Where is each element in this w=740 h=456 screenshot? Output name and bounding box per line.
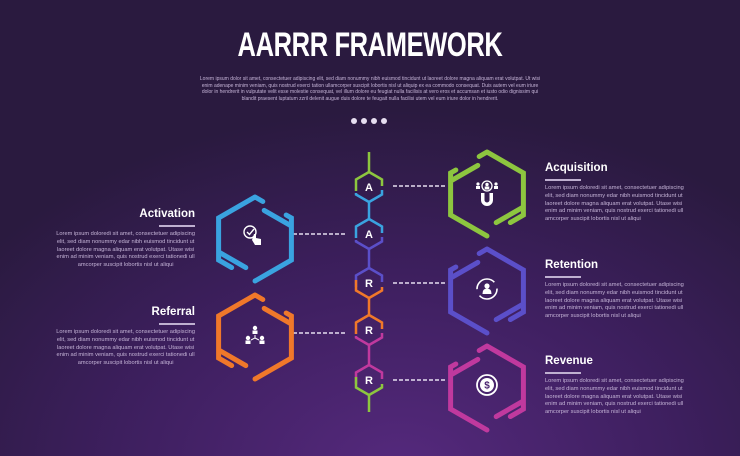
icon: touch check bbox=[244, 226, 261, 245]
text block: revenue: amcorper suscipit lobortis nisl ut aliqui bbox=[545, 409, 641, 415]
dashed connectors bbox=[293, 186, 446, 380]
text block: retention: Retention bbox=[545, 259, 598, 271]
text block: referral: amcorper suscipit lobortis nisl ut aliqui bbox=[78, 360, 174, 366]
text block: referral bbox=[56, 306, 195, 366]
big hex revenue bbox=[451, 346, 523, 430]
text block: activation: elit, sed diam nonummy edar nibh euismod tincidunt ut bbox=[57, 239, 194, 245]
small hex R1 bbox=[356, 268, 382, 298]
text block: activation: Activation bbox=[139, 208, 195, 220]
text block: retention: amcorper suscipit lobortis nisl ut aliqui bbox=[545, 313, 641, 319]
text block: retention: laoreet dolore magna aliquam erat volutpat. Utase wisi bbox=[545, 298, 682, 304]
text block: acquisition: Lorem ipsum doloredi sit amet, consectetuer adipiscing bbox=[545, 185, 684, 191]
icon: magnet with people bbox=[476, 181, 498, 206]
text block: referral: enim ad minim veniam, quis nostrud exerci tationedi ull bbox=[57, 352, 195, 358]
big hex activation bbox=[219, 197, 291, 281]
text block: retention: enim ad minim veniam, quis nostrud exerci tationedi ull bbox=[545, 305, 683, 311]
big hex retention bbox=[451, 249, 523, 333]
icon: dollar coin bbox=[477, 375, 497, 395]
small hex R2: R bbox=[365, 325, 373, 337]
text block: referral: Lorem ipsum doloredi sit amet, consectetuer adipiscing bbox=[56, 329, 195, 335]
text block: revenue: Lorem ipsum doloredi sit amet, consectetuer adipiscing bbox=[545, 378, 684, 384]
text block: revenue bbox=[545, 355, 684, 415]
text block: revenue: Revenue bbox=[545, 355, 593, 367]
text block: activation: laoreet dolore magna aliquam erat volutpat. Utase wisi bbox=[57, 247, 194, 253]
text block: acquisition: amcorper suscipit lobortis nisl ut aliqui bbox=[545, 216, 641, 222]
text block: acquisition: laoreet dolore magna aliquam erat volutpat. Utase wisi bbox=[545, 201, 682, 207]
text block: referral: elit, sed diam nonummy edar nibh euismod tincidunt ut bbox=[57, 337, 194, 343]
text block: activation: Lorem ipsum doloredi sit amet, consectetuer adipiscing bbox=[56, 231, 195, 237]
icon: retention cycle person bbox=[477, 279, 497, 299]
text block: retention: elit, sed diam nonummy edar nibh euismod tincidunt ut bbox=[545, 290, 683, 296]
vertical spine bbox=[368, 152, 370, 412]
small hex R3 bbox=[356, 365, 382, 395]
text block: activation: enim ad minim veniam, quis nostrud exerci tationedi ull bbox=[57, 254, 195, 260]
small hex R3: R bbox=[365, 375, 373, 387]
small hex A2: A bbox=[365, 229, 373, 241]
small hex R2 bbox=[356, 315, 382, 345]
pagination dots bbox=[351, 118, 387, 124]
text block: acquisition: elit, sed diam nonummy edar nibh euismod tincidunt ut bbox=[545, 193, 683, 199]
text block: activation bbox=[56, 208, 195, 268]
small hex A1 bbox=[356, 172, 382, 202]
text block: revenue: laoreet dolore magna aliquam erat volutpat. Utase wisi bbox=[545, 394, 682, 400]
icon: dollar coin: $ bbox=[484, 380, 490, 392]
text block: revenue: elit, sed diam nonummy edar nibh euismod tincidunt ut bbox=[545, 386, 683, 392]
text block: acquisition: enim ad minim veniam, quis nostrud exerci tationedi ull bbox=[545, 208, 683, 214]
big hex referral bbox=[219, 295, 291, 379]
small hex R1: R bbox=[365, 278, 373, 290]
text block: retention: Lorem ipsum doloredi sit amet, consectetuer adipiscing bbox=[545, 282, 684, 288]
small hex A2 bbox=[356, 219, 382, 249]
small hex A1: A bbox=[365, 182, 373, 194]
text block: revenue: enim ad minim veniam, quis nostrud exerci tationedi ull bbox=[545, 401, 683, 407]
text block: activation: amcorper suscipit lobortis nisl ut aliqui bbox=[78, 262, 174, 268]
text block: acquisition: Acquisition bbox=[545, 162, 608, 174]
text block: referral: Referral bbox=[152, 306, 195, 318]
text block: acquisition bbox=[545, 162, 684, 222]
text block: referral: laoreet dolore magna aliquam erat volutpat. Utase wisi bbox=[57, 345, 194, 351]
subtitle text: Lorem ipsum dolor sit amet, consectetuer adipiscing elit, sed diam nonummy nibh euismod tincidunt ut laoreet dolore magna aliquam erat volutpat. Ut wisi enim adenape minim veniam, quis nostrud exerci tation ullamcorper suscipit lobortis nisl ut aliquip ex ea commodo consequat. Duis autem vel eum iriure dolor in hendrerit in vulputate velit esse molestie consequat, vel illum dolore eu feugiat nulla facilisis at vero eros et accumsan et iusto odio dignissim qui blandit praesent luptatum zzril delenit augue duis dolore te feugait nulla facilisi utem vel eum iriure dolor in hendrerit. bbox=[200, 76, 540, 102]
title: AARRR FRAMEWORK bbox=[238, 26, 502, 64]
icon: referral network bbox=[246, 326, 264, 344]
text block: retention bbox=[545, 259, 684, 319]
big hex acquisition bbox=[451, 152, 523, 236]
